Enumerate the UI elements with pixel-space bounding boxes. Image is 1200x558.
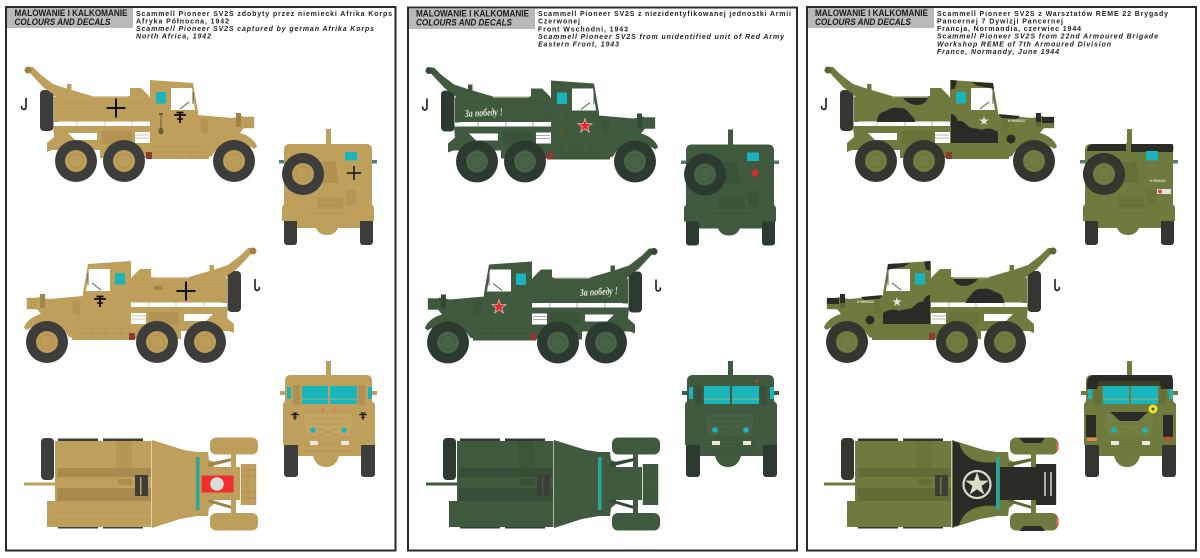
truck: rear view, tan (279, 129, 377, 245)
truck: right side view, tan (24, 248, 259, 363)
caption text: Scammell Pioneer SV2S from unidentified unit of Red Army (538, 34, 785, 41)
caption text (937, 11, 1168, 56)
truck: left side view, olive camouflage (822, 66, 1057, 182)
caption text: Czerwonej (538, 18, 580, 26)
caption text: Afryka Północna, 1942 (136, 18, 229, 26)
truck: left side view, green (423, 67, 658, 182)
caption text: Front Wschodni, 1943 (538, 26, 628, 34)
caption text (136, 11, 392, 40)
truck: top view, tan, with air recognition flag (24, 438, 258, 530)
caption text: Pancernej 7 Dywizji Pancernej (937, 18, 1063, 26)
caption text (538, 11, 791, 48)
truck: right side view, olive camouflage: H 5995322 (857, 300, 874, 304)
truck: front view, green (682, 361, 779, 477)
heading block: colours and decals (7, 8, 133, 28)
truck: left side view, tan (22, 66, 257, 182)
truck: front view, tan (280, 361, 377, 477)
panel frame (6, 7, 396, 550)
panel: REME workshop truck (807, 7, 1196, 550)
truck: rear view, olive camouflage (1080, 129, 1178, 245)
truck: left side view, green: За победу ! (464, 107, 503, 120)
caption text: Workshop REME of 7th Armoured Division (937, 42, 1111, 48)
caption text: Scammell Pioneer SV2S zdobyty przez niemiecki Afrika Korps (136, 11, 392, 18)
heading block: colours and decals: COLOURS AND DECALS (815, 17, 912, 27)
truck: left side view, olive camouflage: H 5995322 (1008, 119, 1025, 123)
truck: top view, green (426, 438, 660, 530)
caption text: Francja, Normandia, czerwiec 1944 (937, 26, 1081, 33)
truck: rear view, green (681, 130, 779, 246)
panel frame (408, 8, 797, 550)
caption text: Scammell Pioneer SV2S z Warsztatów REME 22 Brygady (937, 11, 1168, 18)
panel: Afrika Korps captured truck (6, 7, 396, 550)
caption text: Scammell Pioneer SV2S captured by german Afrika Korps (136, 26, 374, 33)
truck: right side view, green (425, 248, 660, 364)
panel frame (807, 7, 1196, 550)
caption text: France, Normandy, June 1944 (937, 49, 1059, 56)
heading block: colours and decals: MALOWANIE I KALKOMANIE (416, 8, 529, 18)
caption text: North Africa, 1942 (136, 34, 211, 40)
heading block: colours and decals (409, 8, 535, 29)
truck: top view, olive camouflage with Allied star (824, 438, 1058, 531)
caption text: Scammell Pioneer SV2S z niezidentyfikowanej jednostki Armii (538, 11, 791, 18)
truck: right side view, olive camouflage (824, 248, 1059, 363)
truck: right side view, green: За победу ! (579, 286, 618, 299)
truck: rear view, olive camouflage: H 5995322 (1150, 179, 1166, 183)
heading block: colours and decals: COLOURS AND DECALS (416, 17, 513, 27)
heading block: colours and decals: MALOWANIE I KALKOMANIE (815, 8, 928, 18)
caption text: Scammell Pioneer SV2S from 22nd Armoured Brigade (937, 34, 1158, 40)
caption text: Eastern Front, 1943 (538, 42, 619, 48)
heading block: colours and decals: COLOURS AND DECALS (14, 17, 111, 27)
heading block: colours and decals: MALOWANIE I KALKOMANIE (14, 8, 128, 18)
truck: front view, olive camouflage (1081, 361, 1178, 477)
panel: Red Army truck (408, 8, 797, 550)
heading block: colours and decals (808, 8, 934, 28)
